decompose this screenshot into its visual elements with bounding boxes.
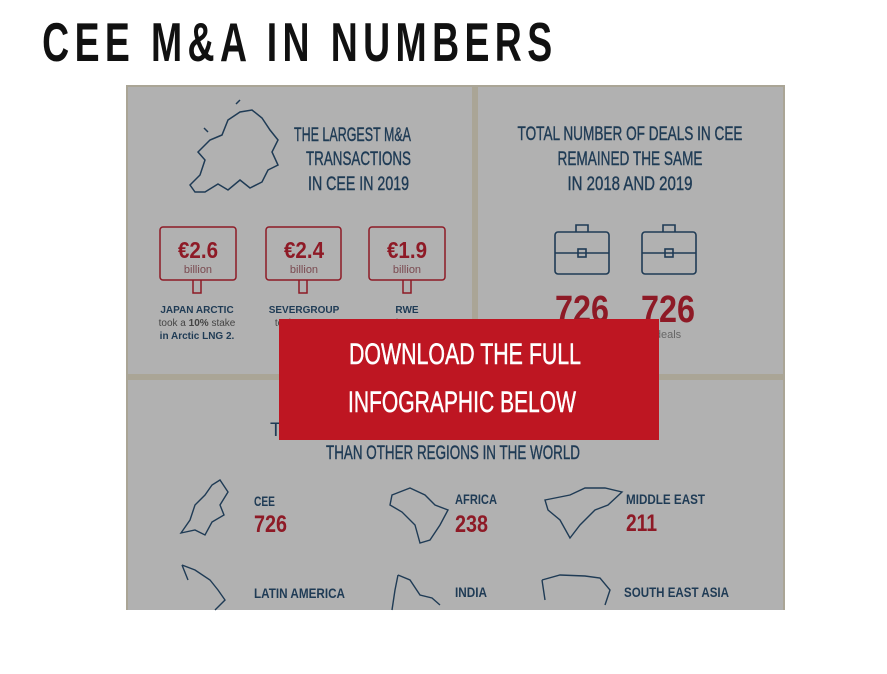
- panel: regions: SOUTH EAST ASIA: [624, 584, 729, 600]
- panel: largest transactions: took a 10% stake: [159, 318, 236, 329]
- panel: total number of deals: 726: [555, 289, 609, 331]
- panel: largest transactions: took a 50.1%: [275, 318, 333, 329]
- panel: largest transactions: stake: [292, 331, 316, 342]
- panel: largest transactions: €2.4: [284, 237, 324, 263]
- panel: regions: 238: [455, 511, 488, 538]
- panel: largest transactions: [128, 87, 472, 374]
- panel: total number of deals: deals: [655, 329, 682, 341]
- icon: briefcases: [555, 225, 696, 274]
- panel: regions: 211: [626, 510, 657, 537]
- panel: total number of deals: 726: [641, 289, 695, 331]
- panel: largest transactions: €2.6: [178, 237, 218, 263]
- panel: largest transactions: in Arctic LNG 2.: [160, 331, 235, 342]
- icon: europe map: [190, 100, 278, 192]
- download button: INFOGRAPHIC BELOW: [348, 386, 576, 419]
- panel: total number of deals: REMAINED THE SAME: [558, 149, 702, 170]
- title: CEE M&A IN NUMBERS: [42, 11, 552, 73]
- panel: total number of deals: [478, 87, 783, 374]
- panel: regions: MIDDLE EAST: [626, 491, 705, 507]
- panel: largest transactions: €1.9: [387, 237, 427, 263]
- panel: regions: INDIA: [455, 584, 487, 600]
- panel: regions: 726: [254, 511, 287, 538]
- infographic preview: [126, 85, 785, 610]
- panel: largest transactions: SEVERGROUP: [269, 305, 340, 316]
- heading: [294, 125, 411, 195]
- panel: regions: AFRICA: [455, 491, 497, 507]
- heading: THE LARGEST M&A: [294, 125, 411, 146]
- panel: regions: LATIN AMERICA: [254, 585, 345, 601]
- panel: total number of deals: TOTAL NUMBER OF DEALS IN CEE: [518, 124, 742, 145]
- deal boxes: [160, 227, 445, 293]
- panel: regions: T: [270, 420, 282, 441]
- icon: region maps: [181, 480, 622, 610]
- panel: largest transactions: billion: [290, 264, 318, 276]
- panel: largest transactions: JAPAN ARCTIC: [160, 305, 234, 316]
- heading: TRANSACTIONS: [306, 149, 411, 170]
- panel: total number of deals: IN 2018 AND 2019: [568, 174, 692, 195]
- panel: largest transactions: RWE: [395, 305, 419, 316]
- download button: [279, 319, 659, 440]
- panel: regions: [128, 380, 783, 610]
- panel: regions: THAN OTHER REGIONS IN THE WORLD: [326, 443, 580, 464]
- panel: largest transactions: billion: [393, 264, 421, 276]
- panel: largest transactions: took a 50%: [382, 318, 432, 329]
- panel: regions: CEE: [254, 493, 275, 509]
- heading: IN CEE IN 2019: [308, 174, 409, 195]
- panel: largest transactions: billion: [184, 264, 212, 276]
- download button: DOWNLOAD THE FULL: [349, 338, 581, 371]
